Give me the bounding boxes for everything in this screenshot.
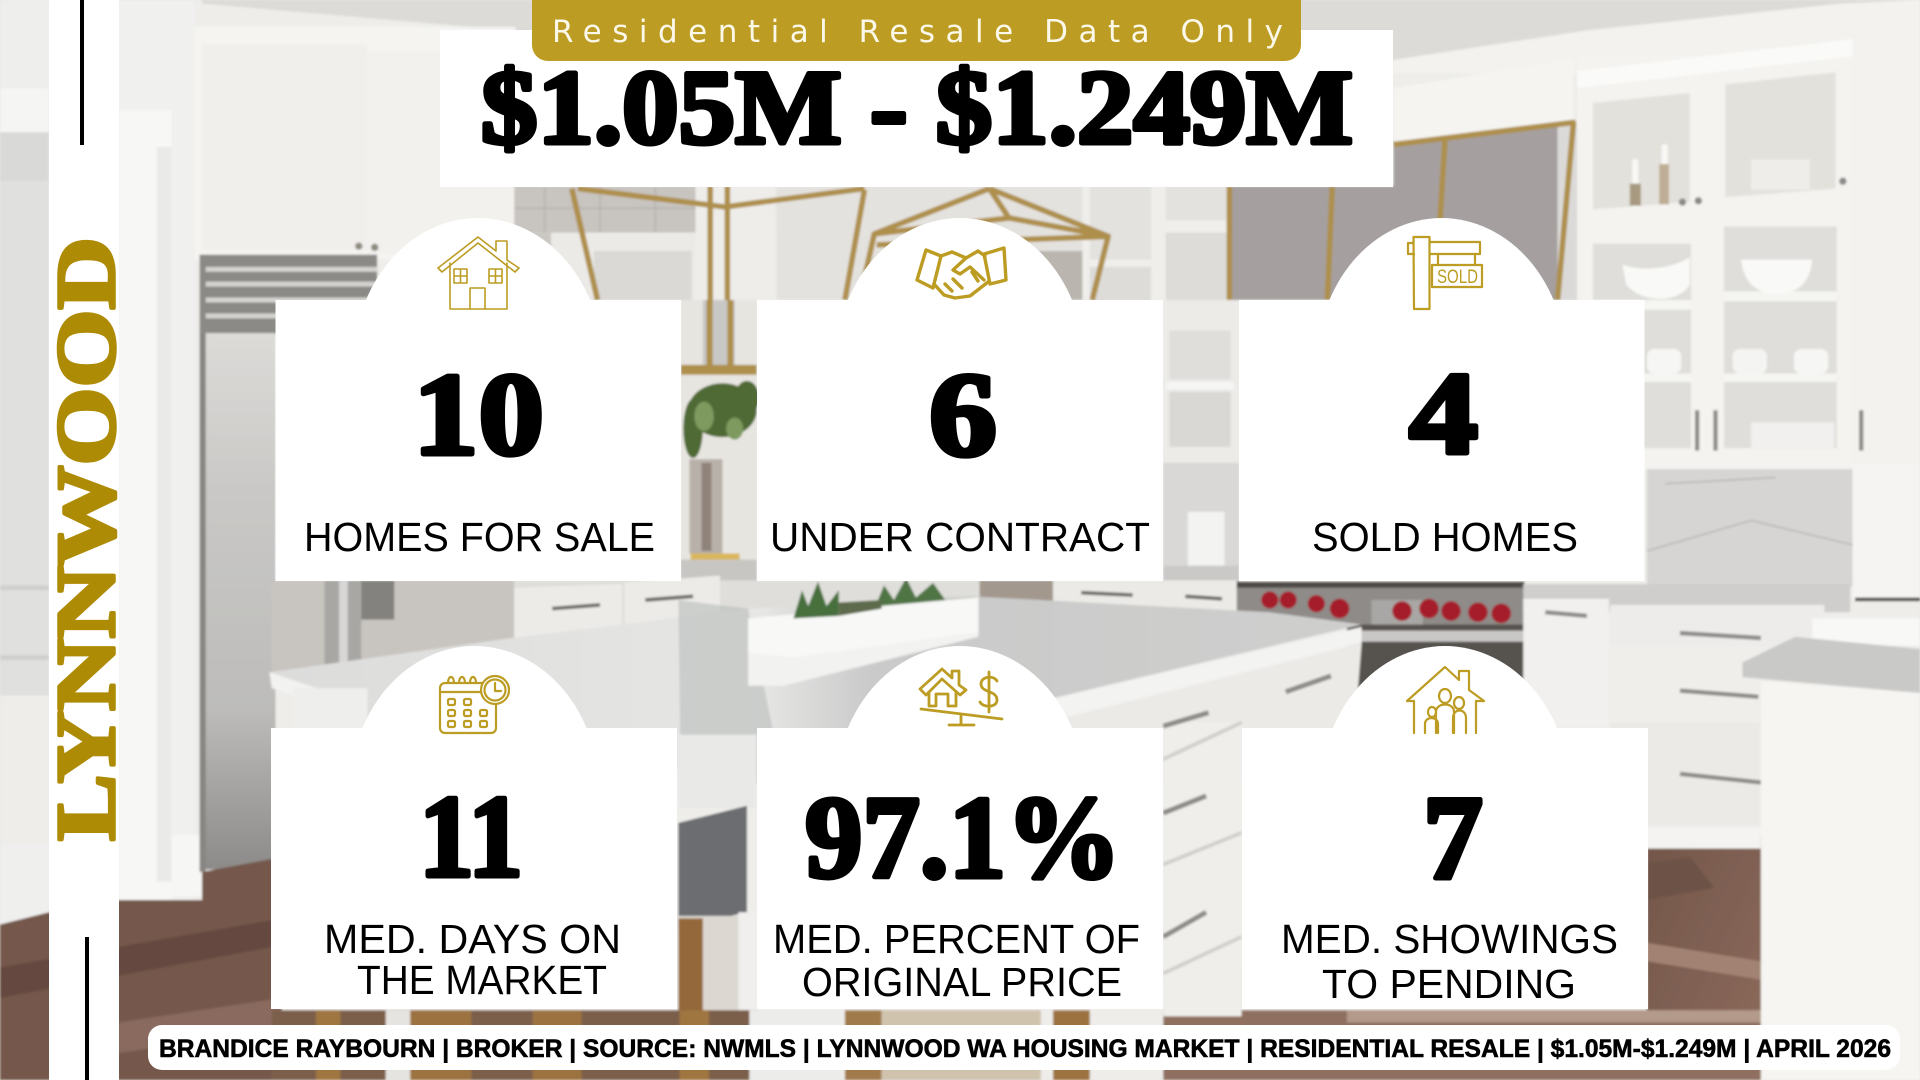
- icon: sold sign: SOLD: [1437, 267, 1478, 288]
- label: under contract: UNDER CONTRACT: [770, 514, 1150, 560]
- card: under contract: [757, 218, 1163, 581]
- value: 4: 4: [1409, 348, 1478, 479]
- label: median days on the market: [324, 916, 621, 1003]
- label: median percent of original price: ORIGINAL PRICE: [802, 959, 1122, 1005]
- city name: LYNNWOOD: LYNNWOOD: [40, 237, 133, 841]
- value: 6: 6: [929, 348, 997, 481]
- label: median percent of original price: [773, 916, 1140, 1005]
- top divider line: [80, 0, 84, 145]
- value: 10: 10: [413, 349, 544, 480]
- left door and wall: [0, 0, 49, 88]
- footer source bar: [148, 1025, 1900, 1070]
- card: median days on market: [271, 646, 677, 1009]
- right base cabinets: [1523, 584, 1850, 612]
- upper fridge cabinet: [195, 27, 516, 260]
- planter with succulents: [748, 598, 978, 658]
- price range panel: [440, 30, 1393, 187]
- value: 11: 11: [419, 771, 523, 902]
- upper middle wall and cabinets: [514, 186, 776, 233]
- gold fixtures: [572, 122, 1573, 300]
- label: homes for sale: HOMES FOR SALE: [304, 514, 655, 560]
- icon: house: [438, 237, 519, 309]
- left vertical strip with city name: [40, 0, 133, 1080]
- badge: residential resale data only: Residential Resale Data Only: [552, 14, 1283, 50]
- island: [269, 596, 1362, 784]
- price range heading: $1.05M - $1.249M: [481, 49, 1353, 166]
- icon: sold sign: [1408, 237, 1482, 309]
- card: homes for sale: [276, 218, 681, 581]
- ceiling: [202, 0, 1920, 60]
- stool and lower island: [678, 735, 757, 808]
- label: median days on the market: MED. DAYS ON: [324, 916, 621, 962]
- right upper cabinets: [1577, 54, 1853, 470]
- label: median days on the market: THE MARKET: [357, 957, 607, 1003]
- floor: [0, 857, 282, 1080]
- label: median showings to pending: MED. SHOWINGS: [1281, 916, 1618, 962]
- back base cabinets: [514, 580, 1237, 637]
- icon: family in house: [1407, 667, 1484, 733]
- card: median showings to pending: [1242, 646, 1648, 1009]
- badge: residential resale data only: [532, 0, 1301, 61]
- island side cabinets: [1054, 643, 1362, 784]
- label: median showings to pending: TO PENDING: [1322, 961, 1576, 1007]
- icon: handshake: [917, 248, 1006, 298]
- bottom divider line: [85, 937, 89, 1080]
- icon: house and dollar on scale: [920, 669, 1002, 725]
- range: [1237, 582, 1524, 626]
- icon: calendar with clock: [440, 676, 509, 733]
- fridge: [200, 255, 377, 334]
- label: sold homes: SOLD HOMES: [1312, 514, 1578, 560]
- footer source bar: BRANDICE RAYBOURN | BROKER | SOURCE: NWMLS | LYNNWOOD WA HOUSING MARKET | RESIDENTIAL RESALE | $1.05M-$1.249M | APRIL 2026: [159, 1035, 1891, 1063]
- mid gap row 1: lamp and plant: [681, 300, 757, 563]
- card: median percent of original price: [757, 646, 1163, 1009]
- value: 97.1%: 97.1%: [805, 772, 1121, 903]
- label: median percent of original price: MED. PERCENT OF: [773, 916, 1140, 962]
- hood: [1231, 122, 1573, 300]
- label: median showings to pending: [1281, 916, 1618, 1007]
- card: sold homes: [1239, 218, 1644, 581]
- value: 7: 7: [1423, 771, 1483, 904]
